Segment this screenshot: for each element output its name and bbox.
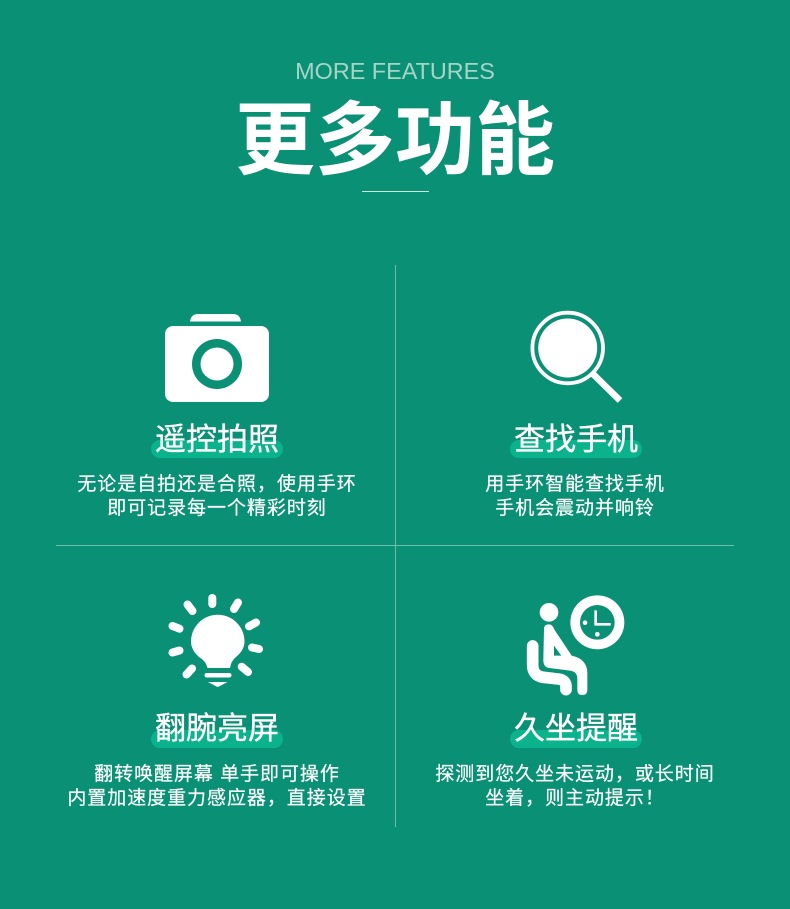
heading: wrist raise screen: 翻腕亮屏 [155,711,279,746]
text: find phone description [485,474,665,519]
panel: sedentary reminder [435,595,715,809]
heading: find phone: 查找手机 [514,422,638,457]
text: wrist raise description [67,764,367,809]
title: 更多功能 [235,96,555,185]
text: remote camera description: 即可记录每一个精彩时刻 [107,498,327,519]
text: find phone description: 手机会震动并响铃 [495,498,655,519]
panel: find phone [485,310,665,519]
text: wrist raise description: 翻转唤醒屏幕 单手即可操作 [94,764,340,785]
subtitle: MORE FEATURES [295,58,495,84]
text: sedentary reminder description: 探测到您久坐未运动，或长时间 [435,764,715,785]
panel: remote camera [77,314,357,519]
text: remote camera description [77,474,357,519]
icon: light bulb [168,594,263,687]
text: remote camera description: 无论是自拍还是合照，使用手环 [77,474,357,495]
text: sedentary reminder description [435,764,715,809]
panel: wrist raise screen [67,594,367,809]
icon: magnifier [530,310,622,403]
heading: remote camera: 遥控拍照 [155,422,279,457]
text: wrist raise description: 内置加速度重力感应器，直接设置 [67,788,367,809]
icon: seated person and clock [526,595,624,696]
icon: camera [165,314,269,402]
text: sedentary reminder description: 坐着，则主动提示！ [485,788,665,809]
text: find phone description: 用手环智能查找手机 [485,474,665,495]
heading: sedentary reminder: 久坐提醒 [514,711,638,746]
